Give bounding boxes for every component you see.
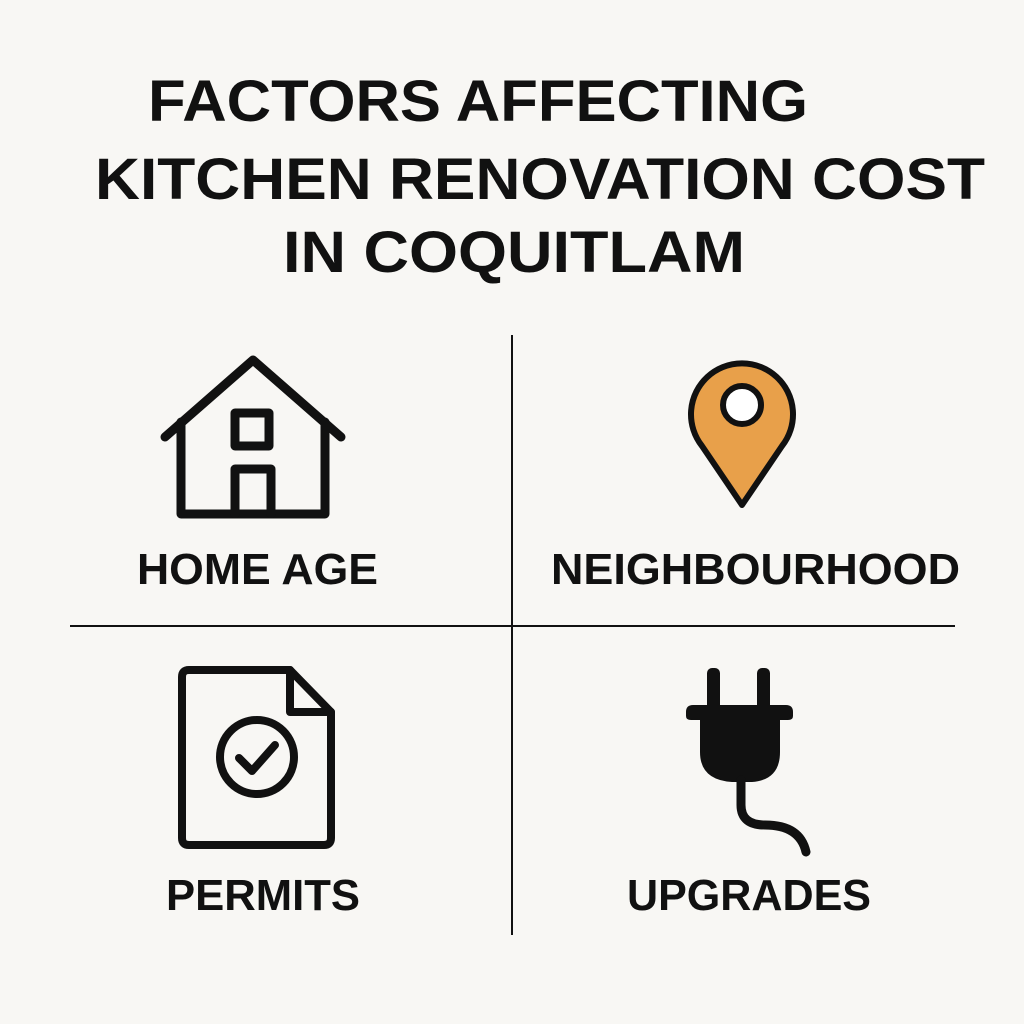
label: home age: HOME AGE [137,545,378,594]
icon: location pin [691,363,793,505]
title: KITCHEN RENOVATION COST [95,147,985,212]
title: IN COQUITLAM [283,220,745,285]
label: upgrades: UPGRADES [627,871,871,920]
label: neighbourhood: NEIGHBOURHOOD [551,545,960,594]
title [95,69,985,285]
icon: document with check [182,670,331,845]
title: FACTORS AFFECTING [148,69,808,134]
label: permits: PERMITS [166,871,360,920]
icon: plug [686,668,806,852]
panel: upgrades [627,668,871,920]
panel: neighbourhood [551,363,960,594]
panel: permits [166,670,360,920]
panel: home age [137,360,378,594]
icon: house [165,360,341,514]
